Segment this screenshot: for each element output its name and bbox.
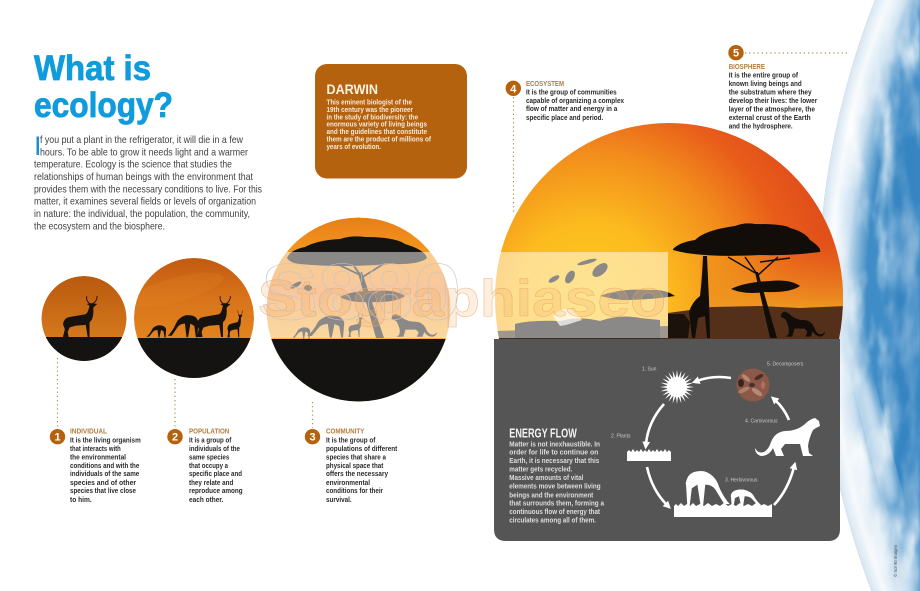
intro text: relationships of human beings with the environment that bbox=[34, 172, 253, 183]
label 5 text: known living beings and bbox=[729, 81, 802, 88]
label 1 text: individuals of the same bbox=[70, 471, 139, 478]
label 2 text: reproduce among bbox=[189, 488, 243, 495]
label 3 text: environmental bbox=[326, 480, 370, 487]
label 5: biosphere bbox=[728, 45, 818, 130]
label 5 text: and the hydrosphere. bbox=[729, 124, 793, 130]
intro text: the ecosystem and the biosphere. bbox=[34, 221, 165, 232]
label 1 text bbox=[70, 438, 141, 504]
energy flow text: Massive amounts of vital bbox=[509, 475, 583, 482]
energy flow text: Matter is not inexhaustible. In bbox=[509, 441, 600, 448]
label 2: population: POPULATION bbox=[189, 428, 229, 436]
icon: sun bbox=[660, 370, 694, 404]
label 4 text bbox=[526, 90, 624, 122]
cycle labels: 3. Herbivorous bbox=[725, 478, 758, 484]
Darwin text: in the study of biodiversity: the bbox=[326, 114, 418, 121]
icon: decomposers bbox=[736, 368, 770, 402]
label 1: individual: 1 bbox=[54, 432, 61, 444]
cycle labels: 1. Sun bbox=[642, 366, 657, 372]
diagram: energy cycle bbox=[611, 362, 820, 517]
label 3 text: physical space that bbox=[326, 463, 384, 470]
label 1: individual: INDIVIDUAL bbox=[70, 428, 108, 436]
intro text: hours. To be able to grow it needs light and a warmer bbox=[40, 147, 248, 158]
label 1 text: the environmental bbox=[70, 454, 126, 462]
energy flow text: beings and the environment bbox=[509, 492, 594, 499]
Darwin text: This eminent biologist of the bbox=[326, 100, 412, 107]
energy flow text: Earth, it is necessary that this bbox=[509, 458, 599, 465]
watermark text: Stographiaseo bbox=[258, 270, 666, 328]
label 2 text bbox=[189, 438, 243, 504]
energy flow text: continuous flow of energy that bbox=[509, 509, 601, 516]
label 3: community: COMMUNITY bbox=[326, 428, 365, 436]
arrows bbox=[646, 377, 794, 505]
credit: © Sol 90 Images bbox=[892, 544, 899, 577]
title: What is bbox=[34, 49, 151, 88]
circle: ecosystem bbox=[490, 120, 850, 340]
label 1 text: species that live close bbox=[70, 488, 136, 495]
intro text: in nature: the individual, the population, the community, bbox=[34, 209, 250, 220]
label 2 text: same species bbox=[189, 454, 229, 462]
energy flow text bbox=[509, 441, 604, 525]
icon: deer bbox=[63, 296, 97, 337]
cycle labels: 5. Decomposers bbox=[767, 362, 804, 368]
icon: herd of deer bbox=[146, 296, 243, 338]
intro text: f you put a plant in the refrigerator, it will die in a few bbox=[40, 135, 243, 146]
cycle labels: 2. Plants bbox=[611, 434, 631, 440]
label 1 text: It is the living organism bbox=[70, 438, 141, 444]
label 5 text: the substratum where they bbox=[729, 90, 812, 96]
label 3 text: conditions for their bbox=[326, 488, 383, 495]
panel: energy flow: ENERGY FLOW bbox=[509, 425, 577, 440]
label 4 text: capable of organizing a complex bbox=[526, 98, 624, 105]
label 1 text: species and of other bbox=[70, 480, 136, 487]
watermark text: S880 bbox=[261, 247, 461, 336]
label 4 text: specific place and period. bbox=[526, 115, 603, 122]
Darwin text: years of evolution. bbox=[326, 144, 381, 151]
cycle labels bbox=[611, 362, 804, 484]
label 5 text: develop their lives: the lower bbox=[729, 98, 818, 105]
label 2 text: they relate and bbox=[189, 480, 233, 487]
intro text: matter, it examines several fields or levels of organization bbox=[34, 197, 256, 208]
circle: community bbox=[260, 218, 460, 405]
watermark band bbox=[258, 247, 668, 338]
label 2: population bbox=[167, 428, 243, 504]
label 2 text: It is a group of bbox=[189, 438, 232, 444]
label 3 text: survival. bbox=[326, 497, 352, 504]
label 5 text bbox=[729, 72, 818, 130]
panel: Darwin: DARWIN bbox=[326, 81, 378, 97]
label 3 text bbox=[326, 438, 398, 504]
energy flow text: that surrounds them, forming a bbox=[509, 501, 604, 508]
cycle labels: 4. Carnivorous bbox=[745, 418, 778, 424]
label 5: biosphere: 5 bbox=[733, 48, 739, 60]
ground bbox=[46, 337, 122, 361]
energy flow text: elements move between living bbox=[509, 483, 601, 490]
label 2 text: each other. bbox=[189, 497, 223, 504]
birds and herd bbox=[515, 257, 675, 338]
label 3: community bbox=[305, 428, 398, 504]
icon: carnivore bbox=[755, 418, 820, 456]
circle: individual bbox=[40, 276, 130, 363]
label 2 text: that occupy a bbox=[189, 463, 228, 470]
label 3 text: It is the group of bbox=[326, 438, 376, 444]
Darwin text: enormous variety of living beings bbox=[326, 122, 427, 129]
label 5: biosphere: BIOSPHERE bbox=[729, 64, 765, 71]
label 1 text: to him. bbox=[70, 497, 92, 504]
hills bbox=[668, 306, 845, 339]
intro text: provides them with the necessary conditions to live. For this bbox=[34, 184, 262, 195]
label 1: individual bbox=[50, 428, 141, 504]
intro text bbox=[34, 131, 262, 232]
label 4: ecosystem: ECOSYSTEM bbox=[526, 81, 564, 88]
ground bbox=[271, 339, 446, 402]
watermark text bbox=[258, 247, 666, 336]
label 2: population: 2 bbox=[172, 432, 178, 444]
intro text: I bbox=[34, 131, 42, 161]
circle: population bbox=[134, 258, 254, 378]
label 3 text: species that share a bbox=[326, 454, 386, 462]
panel: energy flow bbox=[494, 339, 840, 541]
label 3 text: offers the necessary bbox=[326, 471, 388, 478]
label 1 text: that interacts with bbox=[70, 446, 121, 453]
label 4 text: flow of matter and energy in a bbox=[526, 106, 617, 113]
label 1 text: conditions and with the bbox=[70, 463, 139, 470]
energy flow text: matter gets recycled. bbox=[509, 467, 572, 474]
Darwin text: them are the product of millions of bbox=[326, 136, 432, 143]
Darwin text: and the guidelines that constitute bbox=[326, 129, 427, 136]
panel: Darwin bbox=[315, 64, 467, 178]
Darwin text bbox=[326, 100, 432, 151]
ground bbox=[138, 338, 250, 378]
label 5 text: layer of the atmosphere, the bbox=[729, 106, 815, 114]
label 4: ecosystem: 4 bbox=[510, 83, 517, 95]
label 5 text: external crust of the Earth bbox=[729, 115, 811, 122]
label 2 text: individuals of the bbox=[189, 446, 240, 453]
label 2 text: specific place and bbox=[189, 471, 242, 478]
energy flow text: order for life to continue on bbox=[509, 450, 598, 457]
Darwin text: 19th century was the pioneer bbox=[326, 107, 413, 114]
energy flow text: circulates among all of them. bbox=[509, 518, 596, 525]
acacia tree and animals bbox=[287, 236, 437, 338]
label 3: community: 3 bbox=[309, 432, 316, 444]
label 3 text: populations of different bbox=[326, 446, 398, 453]
icon: herbivores bbox=[674, 471, 772, 517]
title: ecology? bbox=[34, 86, 173, 125]
label 4: ecosystem bbox=[506, 81, 624, 122]
intro text: temperature. Ecology is the science that studies the bbox=[34, 160, 232, 171]
acacia tree and giraffe bbox=[668, 223, 825, 338]
dotted connectors bbox=[58, 53, 847, 428]
label 4 text: It is the group of communities bbox=[526, 90, 617, 96]
photo: Earth limb bbox=[822, 0, 920, 591]
label 5 text: It is the entire group of bbox=[729, 72, 799, 80]
icon: plants bbox=[627, 449, 671, 461]
title bbox=[34, 49, 173, 125]
